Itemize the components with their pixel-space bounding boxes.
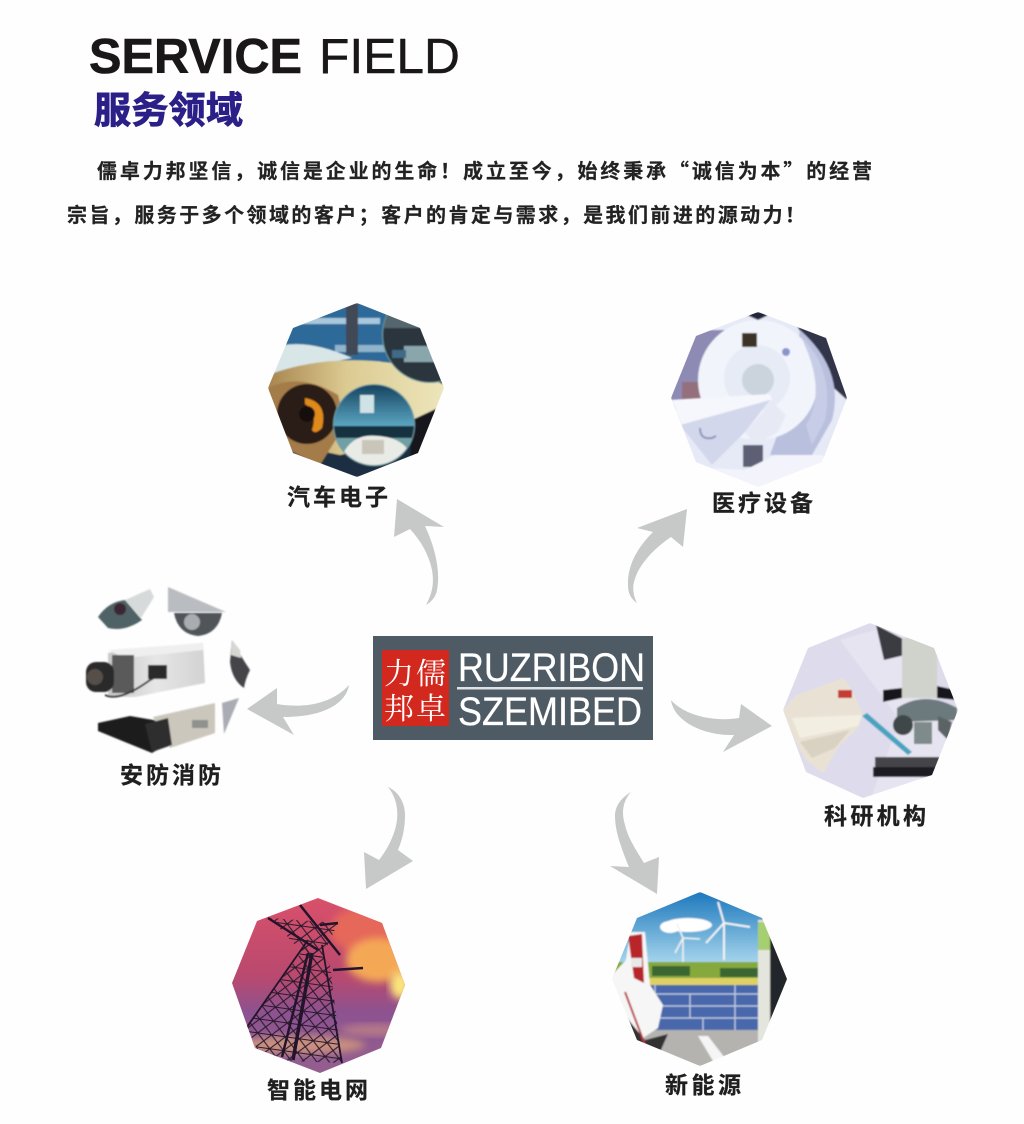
arrow: to research — [671, 700, 772, 752]
label: 汽车电子 — [287, 478, 388, 512]
label: 安防消防 — [120, 756, 221, 790]
intro paragraph: 宗旨，服务于多个领域的客户；客户的肯定与需求，是我们前进的源动力！ — [67, 199, 805, 228]
icon: car and dashboard photo — [268, 303, 444, 477]
label: 智能电网 — [267, 1071, 368, 1105]
panel: smart grid — [232, 898, 410, 1105]
panel: research institutions — [783, 623, 960, 831]
title: SERVICE — [89, 30, 302, 84]
panel: security and fire — [86, 587, 250, 790]
icon: red seal: 儒 — [416, 649, 446, 693]
icon: MRI scanner photo — [671, 312, 847, 490]
arrow: to smart grid — [364, 787, 413, 889]
icon: red seal: 邦 — [384, 684, 414, 728]
arrow: to new energy — [610, 792, 659, 894]
panel: central logo — [373, 636, 653, 740]
icon: red seal: 卓 — [416, 684, 446, 728]
title — [89, 30, 460, 84]
brand name: SZEMIBED — [458, 690, 642, 734]
label: 医疗设备 — [712, 484, 813, 518]
label: 新能源 — [665, 1066, 741, 1100]
arrow: to security — [247, 685, 349, 735]
subtitle: 服务领域 — [94, 80, 243, 134]
icon: red seal — [382, 649, 449, 728]
icon: red seal: 力 — [384, 649, 414, 693]
panel: medical equipment — [671, 312, 847, 518]
icon: microscope and pipette photo — [783, 623, 960, 800]
icon: pylon at sunset photo — [232, 898, 410, 1074]
panel: new energy — [612, 892, 788, 1100]
intro paragraph: 儒卓力邦坚信，诚信是企业的生命！成立至今，始终秉承“诚信为本”的经营 — [97, 155, 872, 184]
brand name: RUZRIBON — [458, 646, 645, 690]
icon: wind, solar and electric car photo — [612, 892, 788, 1066]
panel: automotive electronics — [268, 303, 444, 508]
intro paragraph — [67, 155, 872, 228]
arrow: to automotive — [394, 499, 444, 605]
arrow: to medical — [628, 509, 687, 603]
brand name — [457, 646, 645, 734]
label: 科研机构 — [824, 797, 926, 831]
title: FIELD — [319, 30, 460, 84]
icon: security cameras — [86, 587, 250, 753]
